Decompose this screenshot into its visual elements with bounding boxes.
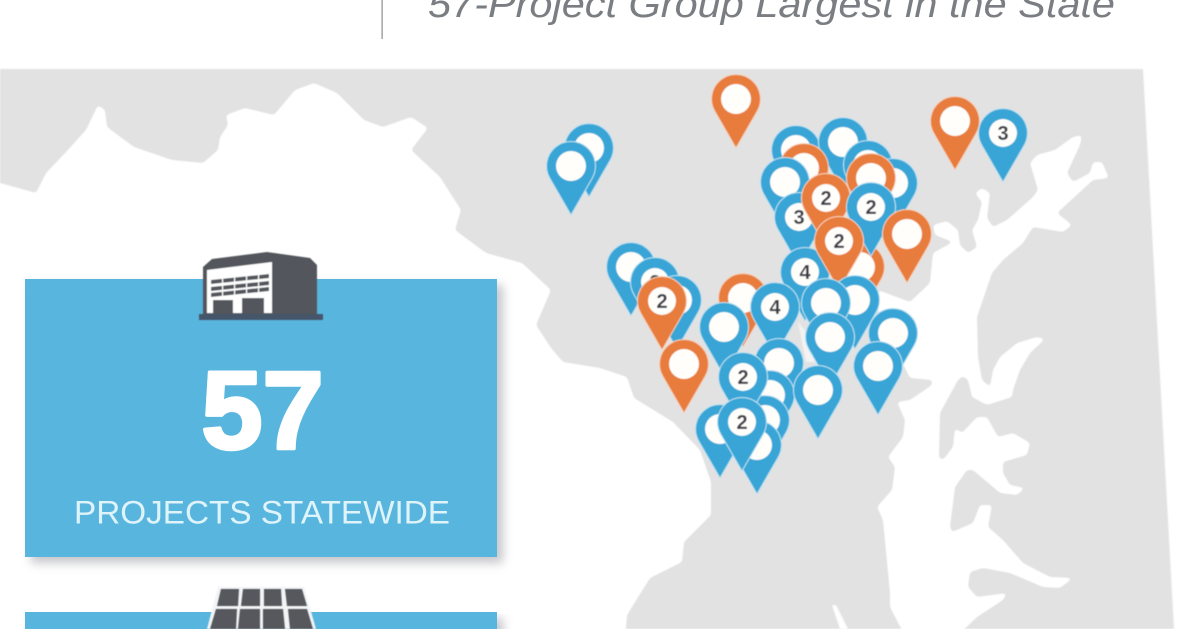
pin: west orange two: 2 <box>656 291 668 313</box>
pin: cluster orange two: 2 <box>820 188 832 210</box>
pin: cluster orange right <box>882 209 932 283</box>
pin: north orange <box>712 74 760 148</box>
pin: west orange two <box>638 276 686 350</box>
pin: south two upper <box>718 352 768 426</box>
pin: cluster orange hidden <box>836 242 884 316</box>
icon: building <box>199 252 323 320</box>
pin: cluster blue two: 2 <box>865 197 877 219</box>
pin: south blue a <box>754 338 804 412</box>
pin: south two upper: 2 <box>737 367 749 389</box>
pin: cluster orange lower two: 2 <box>833 231 845 253</box>
pin: cluster four: 4 <box>799 262 811 284</box>
pin: cluster blue e <box>760 157 810 231</box>
pin: west blue a <box>606 242 656 316</box>
pin: cluster blue d <box>868 158 918 232</box>
pin: south blue d <box>740 395 790 469</box>
pin: cluster blue c <box>844 140 892 214</box>
pin: west blue b: 2 <box>649 272 661 294</box>
panel: second stat card <box>25 612 503 629</box>
pin: far east back <box>868 308 918 382</box>
pin: southwest orange <box>660 339 708 413</box>
pin: northeast orange <box>930 96 980 170</box>
pin: cluster orange a <box>780 143 828 217</box>
pin: northeast three <box>978 108 1028 182</box>
pin: west blue b <box>630 257 680 331</box>
pin: east blue back <box>830 275 880 349</box>
pin: south blue b <box>746 370 794 444</box>
panel: projects statewide <box>25 279 503 563</box>
pin: west blue c <box>652 275 702 349</box>
pin: northeast three: 3 <box>997 123 1009 145</box>
stat label: PROJECTS STATEWIDE <box>74 494 450 530</box>
map pins <box>546 74 1028 494</box>
pin: cluster orange two <box>802 173 850 247</box>
pin: cluster three: 3 <box>793 207 805 229</box>
pin: northwest back <box>564 123 614 197</box>
pin: central blue <box>700 302 748 376</box>
pin: cluster blue two <box>846 182 896 256</box>
pin: south blue e <box>732 420 782 494</box>
pin: cluster orange b <box>846 153 896 227</box>
pin: cluster blue a <box>772 125 820 199</box>
pin: south two lower: 2 <box>736 412 748 434</box>
pin: central four <box>750 282 800 356</box>
pin: cluster blue b <box>818 117 868 191</box>
pin: south blue f <box>696 404 744 478</box>
pin: central orange <box>718 273 768 347</box>
stat number: 57 <box>201 350 324 472</box>
pin: far east front <box>854 341 902 415</box>
pin: cluster four <box>780 247 830 321</box>
pin: cluster orange lower two <box>814 216 864 290</box>
pin: south blue c <box>794 365 842 439</box>
pin: cluster three <box>774 192 824 266</box>
header divider <box>382 0 383 39</box>
pin: northwest front <box>546 141 596 215</box>
pin: east blue front <box>806 312 854 386</box>
pin: south two lower <box>718 397 766 471</box>
pin: east blue middle <box>802 278 850 352</box>
icon: solar panel <box>207 587 316 629</box>
pin: central four: 4 <box>769 297 781 319</box>
